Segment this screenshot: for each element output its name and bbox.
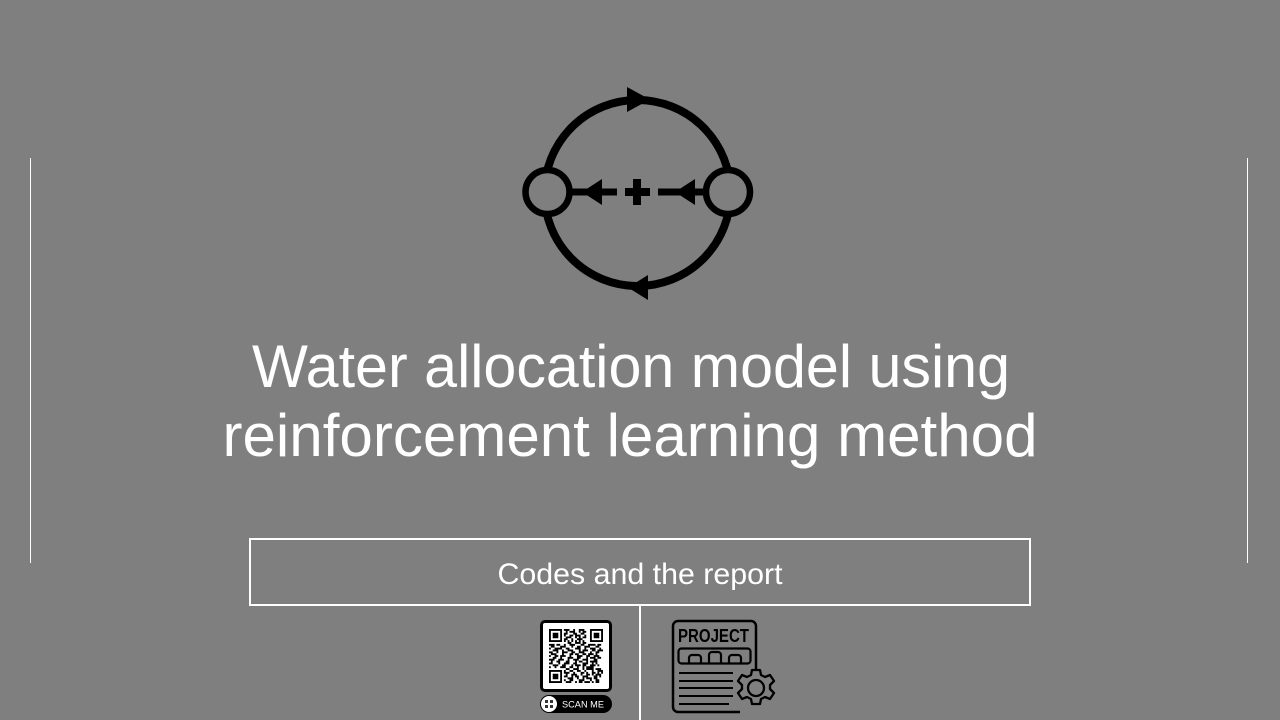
icon: project document with gear: PROJECT <box>678 626 749 646</box>
callout box: codes and the report <box>250 539 1030 605</box>
title line 2: reinforcement learning method <box>222 402 1038 469</box>
icon: QR code with scan me label: SCAN ME <box>562 700 604 710</box>
icon: project document with gear <box>673 621 774 712</box>
callout box: codes and the report: Codes and the report <box>498 558 783 591</box>
icon: reinforcement loop diagram <box>526 87 750 300</box>
title: Water allocation model using <box>252 333 1010 400</box>
icon: QR code with scan me label <box>540 620 612 713</box>
